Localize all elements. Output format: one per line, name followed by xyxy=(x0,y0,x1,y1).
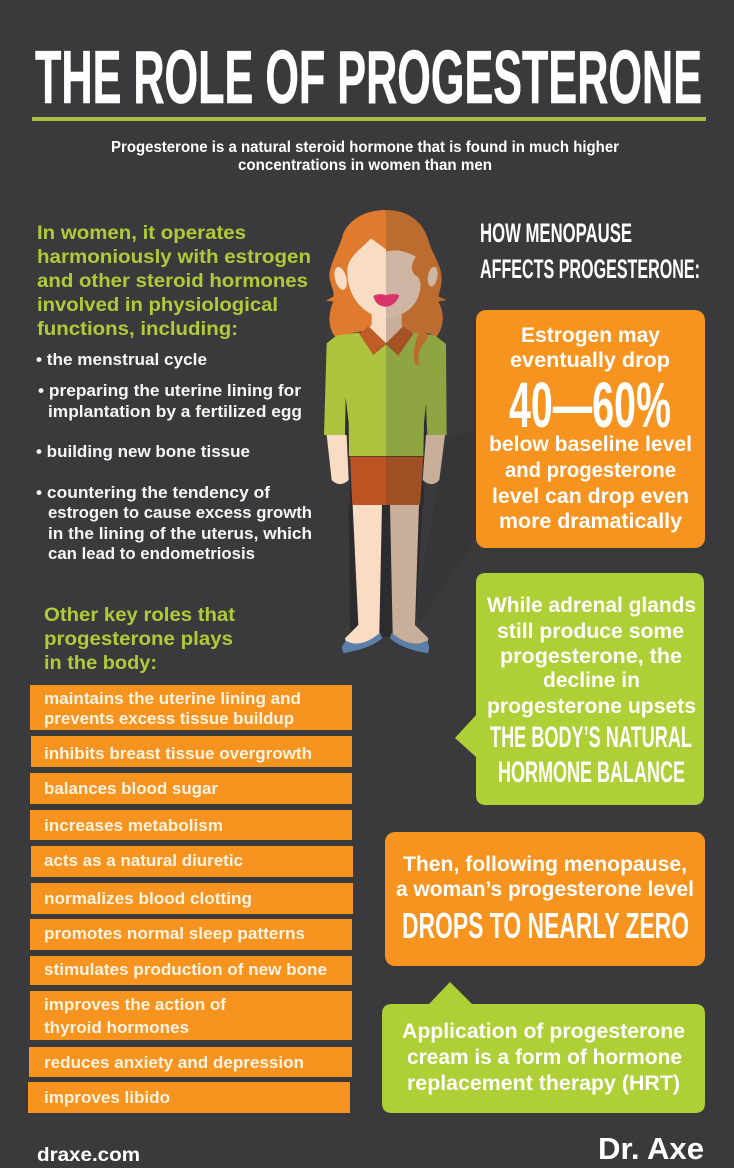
callout: drops to nearly zero xyxy=(385,832,705,966)
subtitle xyxy=(111,139,619,174)
intro heading: involved in physiological xyxy=(37,295,278,316)
callout: adrenal glands: still produce some xyxy=(497,620,684,643)
callout: estrogen drop: Estrogen may xyxy=(521,324,660,347)
menopause heading: HOW MENOPAUSE xyxy=(480,218,632,248)
callout: estrogen drop: more dramatically xyxy=(499,510,682,533)
intro heading: and other steroid hormones xyxy=(37,271,308,292)
callout: adrenal glands: progesterone upsets xyxy=(487,695,696,718)
orange list of key roles: reduces anxiety and depression xyxy=(44,1053,304,1072)
list of functions: can lead to endometriosis xyxy=(48,544,255,563)
orange list of key roles: normalizes blood clotting xyxy=(44,889,252,908)
orange list of key roles: maintains the uterine lining and xyxy=(44,689,301,708)
intro heading: harmoniously with estrogen xyxy=(37,247,311,268)
orange list of key roles: improves the action of xyxy=(44,995,226,1014)
subtitle: Progesterone is a natural steroid hormone that is found in much higher xyxy=(111,139,619,156)
menopause heading xyxy=(480,218,700,284)
list of functions: • building new bone tissue xyxy=(36,442,250,461)
list of functions: implantation by a fertilized egg xyxy=(48,402,302,421)
orange list of key roles: thyroid hormones xyxy=(44,1018,189,1037)
orange list of key roles xyxy=(28,685,353,1113)
list of functions: estrogen to cause excess growth xyxy=(48,503,312,522)
logo: Dr. Axe: Dr. Axe xyxy=(598,1131,704,1166)
orange list of key roles: increases metabolism xyxy=(44,816,223,835)
callout: hormone replacement therapy xyxy=(382,982,705,1113)
list of functions: • preparing the uterine lining for xyxy=(38,381,301,400)
list of functions: • the menstrual cycle xyxy=(36,350,207,369)
callout: adrenal glands xyxy=(455,573,704,805)
callout: hormone replacement therapy: cream is a form of hormone xyxy=(407,1046,682,1069)
orange list of key roles: prevents excess tissue buildup xyxy=(44,709,294,728)
callout: estrogen drop: below baseline level xyxy=(489,433,692,456)
callout: estrogen drop: and progesterone xyxy=(505,459,676,482)
subtitle: concentrations in women than men xyxy=(238,157,492,174)
callout: adrenal glands: While adrenal glands xyxy=(487,594,696,617)
callout: estrogen drop xyxy=(476,310,705,548)
orange list of key roles: stimulates production of new bone xyxy=(44,960,327,979)
figure shadow xyxy=(417,430,476,625)
list of functions xyxy=(36,350,312,563)
orange list of key roles: inhibits breast tissue overgrowth xyxy=(44,744,312,763)
callout: drops to nearly zero: a woman’s progesterone level xyxy=(396,878,694,901)
callout: hormone replacement therapy: Application of progesterone xyxy=(402,1020,685,1043)
website: draxe.com xyxy=(37,1145,140,1166)
callout: estrogen drop: eventually drop xyxy=(510,349,670,372)
callout: adrenal glands: decline in xyxy=(543,669,640,692)
other key roles heading xyxy=(44,605,236,674)
callout: hormone replacement therapy: replacement therapy (HRT) xyxy=(407,1072,680,1095)
orange list of key roles: balances blood sugar xyxy=(44,779,218,798)
callout: adrenal glands: progesterone, the xyxy=(500,645,682,668)
illustration: woman xyxy=(324,210,447,653)
intro heading: functions, including: xyxy=(37,319,238,340)
other key roles heading: Other key roles that xyxy=(44,605,236,626)
list of functions: • countering the tendency of xyxy=(36,483,270,502)
callout: drops to nearly zero: Then, following menopause, xyxy=(403,853,687,876)
orange list of key roles: promotes normal sleep patterns xyxy=(44,924,305,943)
intro heading xyxy=(37,223,311,340)
intro heading: In women, it operates xyxy=(37,223,246,244)
list of functions: in the lining of the uterus, which xyxy=(48,524,312,543)
orange list of key roles: acts as a natural diuretic xyxy=(44,851,243,870)
other key roles heading: in the body: xyxy=(44,653,157,674)
other key roles heading: progesterone plays xyxy=(44,629,233,650)
callout: estrogen drop: level can drop even xyxy=(492,485,689,508)
orange list of key roles: improves libido xyxy=(44,1088,170,1107)
